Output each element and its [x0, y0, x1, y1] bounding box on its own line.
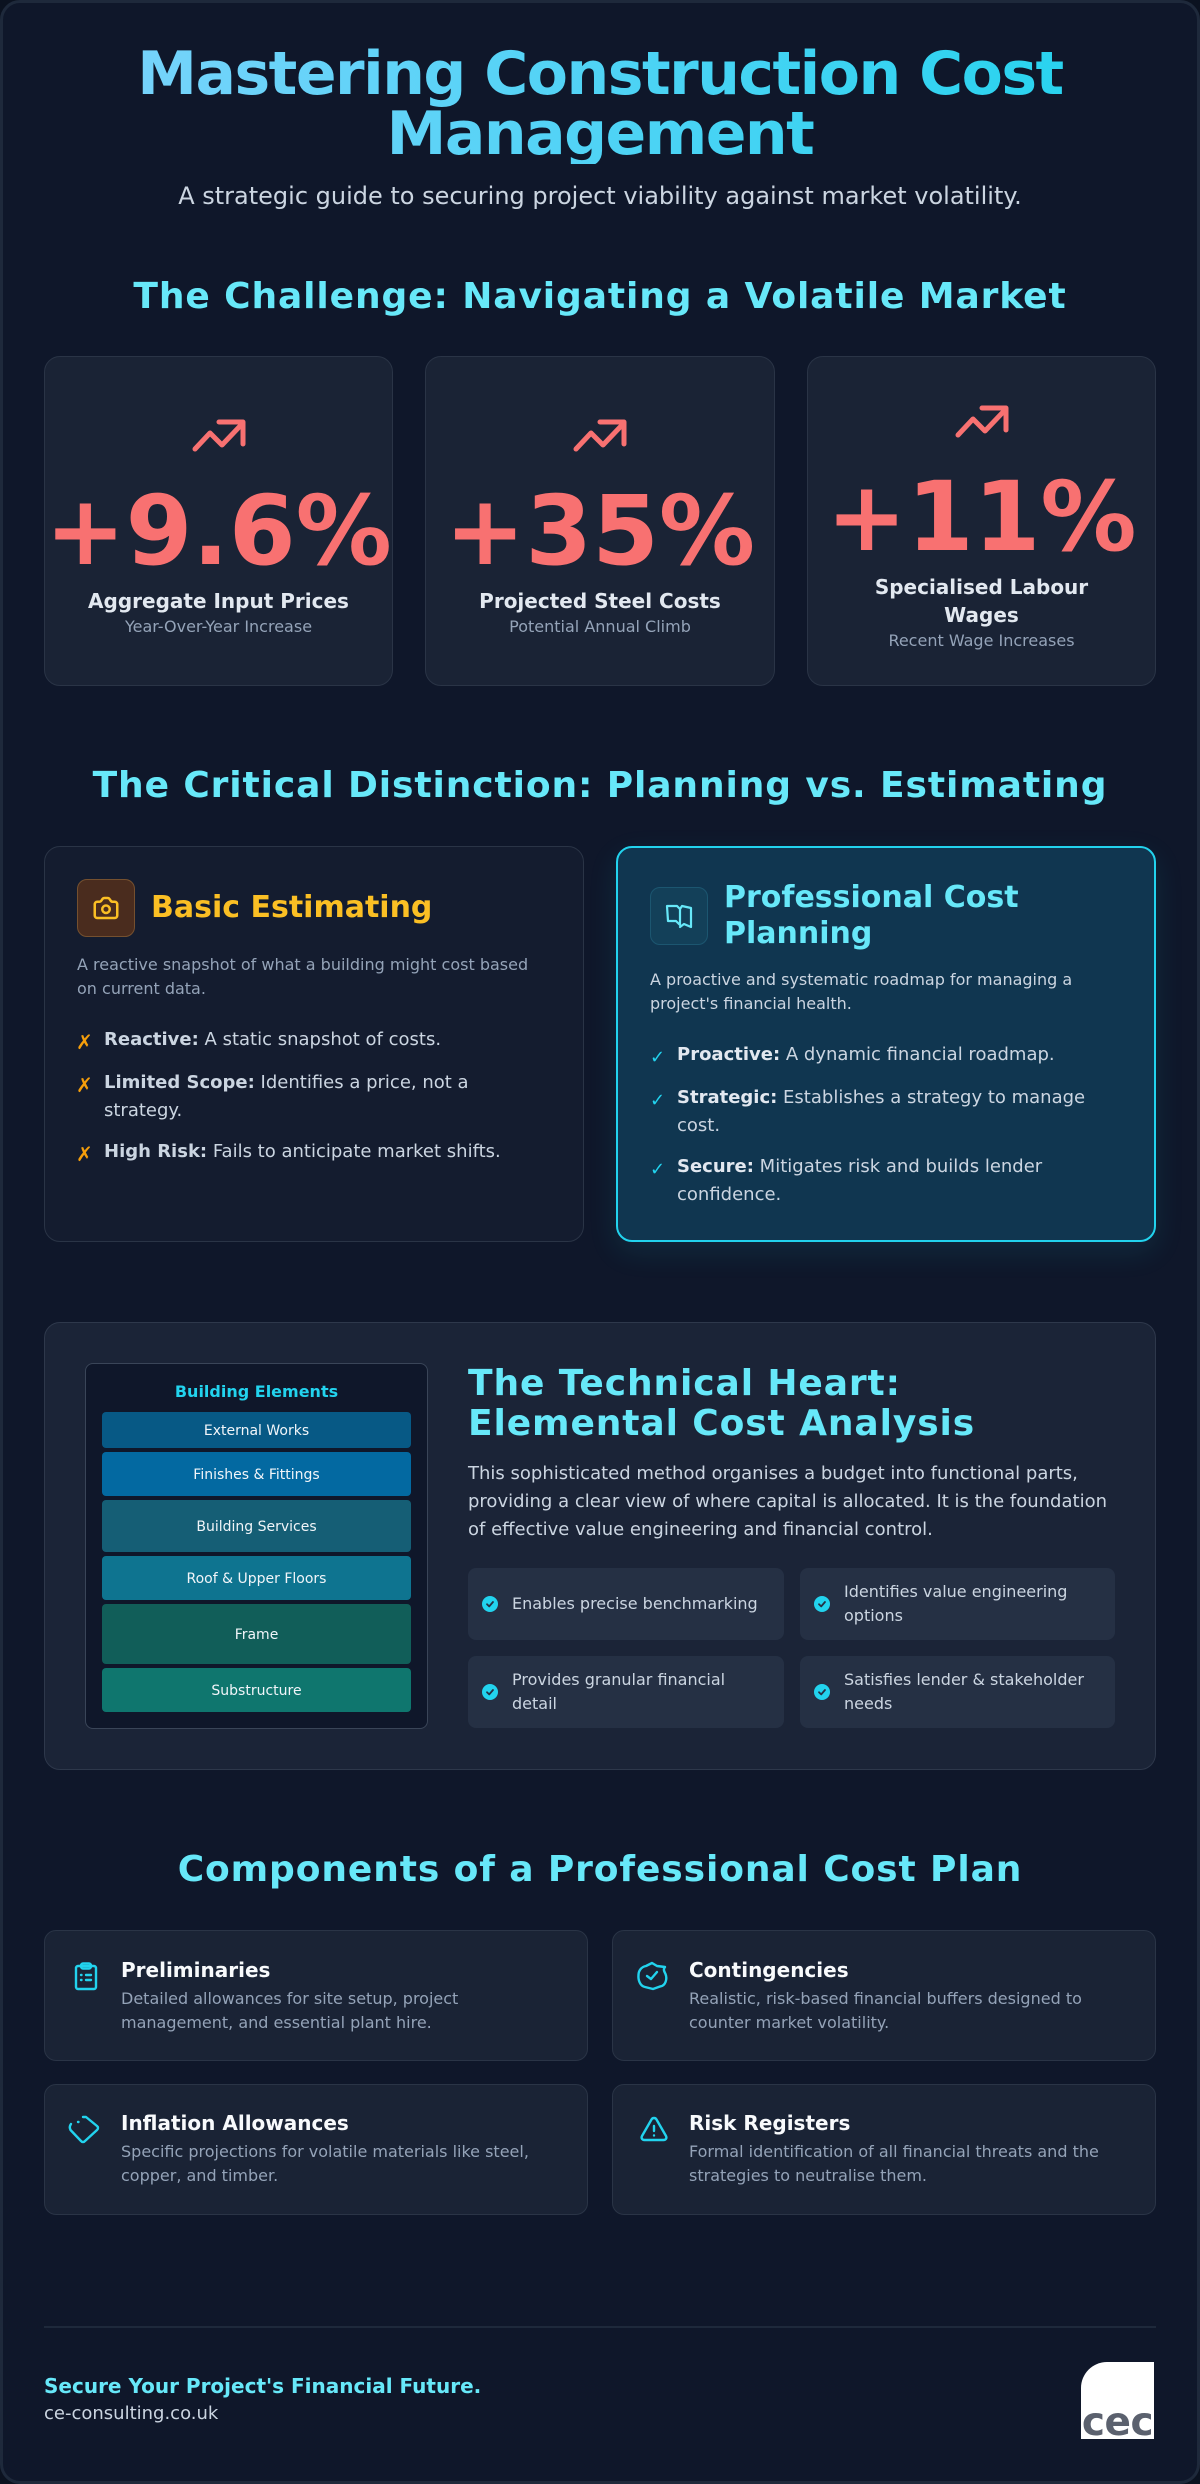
icon: shield check: [637, 1962, 668, 1990]
point: high risk: High Risk: Fails to anticipate market shifts.: [104, 1141, 501, 1162]
chip text: Satisfies lender & stakeholder: [844, 1670, 1084, 1689]
logo: cec: [1081, 2362, 1154, 2439]
heading: the challenge: The Challenge: Navigating a Volatile Market: [133, 276, 1067, 317]
footer call to action: Secure Your Project's Financial Future.: [44, 2374, 481, 2398]
point: secure: Secure: Mitigates risk and builds lender: [677, 1156, 1042, 1177]
preliminaries title: Preliminaries: [121, 1958, 270, 1982]
stat caption: Recent Wage Increases: [888, 631, 1075, 650]
icon: check: [814, 1684, 830, 1700]
point: limited scope: ✗: [76, 1073, 93, 1097]
inflation allowances description: [121, 2142, 529, 2185]
icon: camera: [77, 879, 135, 937]
footer website: ce-consulting.co.uk: [44, 2403, 218, 2424]
point: limited scope: Limited Scope: Identifies a price, not a: [104, 1072, 469, 1093]
stat label: [875, 575, 1088, 627]
panel: projected steel costs stat: [425, 356, 775, 686]
chip: benchmarking: [468, 1568, 784, 1640]
bar: roof and upper floors: [102, 1556, 411, 1600]
chip text: detail: [512, 1694, 557, 1713]
stat label: Wages: [944, 603, 1019, 627]
panel: technical heart: [44, 1322, 1156, 1770]
icon: warning triangle: [640, 2116, 668, 2142]
preliminaries description: Detailed allowances for site setup, project: [121, 1989, 458, 2008]
chip text: Enables precise benchmarking: [512, 1594, 758, 1613]
panel: inflation allowances: [44, 2084, 588, 2215]
icon: tag: [68, 2116, 100, 2144]
technical heart description: of effective value engineering and financial control.: [468, 1519, 933, 1540]
subtitle: A strategic guide to securing project viability against market volatility.: [178, 182, 1022, 210]
professional cost planning description: [650, 970, 1072, 1013]
point: strategic: Strategic: Establishes a strategy to manage: [677, 1087, 1085, 1108]
panel: contingencies: [612, 1930, 1156, 2061]
list: professional cost planning points: [650, 1044, 1085, 1205]
technical heart description: providing a clear view of where capital is allocated. It is the foundation: [468, 1491, 1107, 1512]
heading: critical distinction: The Critical Distinction: Planning vs. Estimating: [93, 765, 1107, 806]
contingencies description: counter market volatility.: [689, 2013, 889, 2032]
risk registers title: Risk Registers: [689, 2111, 850, 2135]
chip text: [844, 1670, 1084, 1713]
point: reactive: ✗: [76, 1030, 93, 1054]
stat label: Aggregate Input Prices: [88, 589, 349, 613]
basic estimating description: A reactive snapshot of what a building might cost based: [77, 955, 528, 974]
point: limited scope: strategy.: [104, 1100, 182, 1121]
chip: value engineering: [800, 1568, 1115, 1640]
panel: professional cost planning: [616, 846, 1156, 1242]
panel: basic estimating: [44, 846, 584, 1242]
professional cost planning title: Planning: [724, 916, 872, 951]
chip text: needs: [844, 1694, 892, 1713]
stat caption: Potential Annual Climb: [509, 617, 691, 636]
point: secure: confidence.: [677, 1184, 781, 1205]
icon: open book: [650, 887, 708, 945]
icon: trending up: [956, 406, 1008, 438]
chip text: Provides granular financial: [512, 1670, 725, 1689]
list: basic estimating points: [76, 1029, 501, 1166]
contingencies description: [689, 1989, 1082, 2032]
chip: granular detail: [468, 1656, 784, 1728]
point: reactive: Reactive: A static snapshot of costs.: [104, 1029, 441, 1050]
inflation allowances description: copper, and timber.: [121, 2166, 278, 2185]
chip text: options: [844, 1606, 903, 1625]
point: strategic: ✓: [650, 1090, 665, 1111]
chip text: [844, 1582, 1067, 1625]
risk registers description: Formal identification of all financial threats and the: [689, 2142, 1099, 2161]
professional cost planning description: A proactive and systematic roadmap for managing a: [650, 970, 1072, 989]
professional cost planning description: project's financial health.: [650, 994, 852, 1013]
icon: check: [482, 1596, 498, 1612]
preliminaries description: [121, 1989, 458, 2032]
bar: finishes and fittings: Finishes & Fittings: [193, 1466, 320, 1482]
point: secure: [650, 1156, 1042, 1205]
point: strategic: [650, 1087, 1085, 1136]
point: strategic: cost.: [677, 1115, 720, 1136]
bar: roof and upper floors: Roof & Upper Floors: [187, 1570, 326, 1586]
point: high risk: ✗: [76, 1142, 93, 1166]
basic estimating title: Basic Estimating: [151, 890, 432, 925]
stat label: Specialised Labour: [875, 575, 1088, 599]
panel: aggregate input prices stat: [44, 356, 393, 686]
technical heart title: The Technical Heart:: [468, 1363, 901, 1404]
bar: building services: [102, 1500, 411, 1552]
bar: frame: [102, 1604, 411, 1664]
technical heart description: This sophisticated method organises a budget into functional parts,: [468, 1463, 1078, 1484]
icon: clipboard: [74, 1962, 98, 1990]
title: Mastering Construction Cost: [137, 39, 1063, 109]
panel: risk registers: [612, 2084, 1156, 2215]
building elements diagram: [85, 1363, 428, 1729]
inflation allowances title: Inflation Allowances: [121, 2111, 349, 2135]
title: [44, 44, 1156, 164]
risk registers description: strategies to neutralise them.: [689, 2166, 927, 2185]
bar: substructure: Substructure: [211, 1682, 302, 1698]
bar: external works: [102, 1412, 411, 1448]
panel: preliminaries: [44, 1930, 588, 2061]
technical heart title: Elemental Cost Analysis: [468, 1403, 975, 1444]
point: limited scope: [76, 1072, 469, 1121]
heading: components: Components of a Professional Cost Plan: [178, 1849, 1022, 1890]
icon: trending up: [192, 420, 246, 452]
point: secure: ✓: [650, 1159, 665, 1180]
diagram title: Building Elements: [175, 1382, 338, 1401]
chip text: [512, 1670, 725, 1713]
icon: check: [814, 1596, 830, 1612]
contingencies description: Realistic, risk-based financial buffers designed to: [689, 1989, 1082, 2008]
title: Management: [387, 99, 813, 169]
bar: external works: External Works: [204, 1422, 309, 1438]
bar: substructure: [102, 1668, 411, 1712]
contingencies title: Contingencies: [689, 1958, 849, 1982]
inflation allowances description: Specific projections for volatile materials like steel,: [121, 2142, 529, 2161]
point: proactive: ✓: [650, 1047, 665, 1068]
icon: check: [482, 1684, 498, 1700]
chip text: Identifies value engineering: [844, 1582, 1067, 1601]
bar: frame: Frame: [235, 1626, 278, 1642]
bar: finishes and fittings: [102, 1452, 411, 1496]
stat label: Projected Steel Costs: [479, 589, 721, 613]
risk registers description: [689, 2142, 1099, 2185]
professional cost planning title: Professional Cost: [724, 880, 1019, 915]
stat caption: Year-Over-Year Increase: [125, 617, 312, 636]
chip: stakeholder needs: [800, 1656, 1115, 1728]
icon: trending up: [574, 420, 626, 452]
technical heart title: [468, 1363, 975, 1444]
point: proactive: Proactive: A dynamic financial roadmap.: [677, 1044, 1055, 1065]
stat value: +9.6%: [45, 475, 392, 587]
bar: building services: Building Services: [196, 1518, 317, 1534]
preliminaries description: management, and essential plant hire.: [121, 2013, 432, 2032]
technical heart description: [468, 1463, 1107, 1540]
panel: specialised labour wages stat: [807, 356, 1156, 686]
professional cost planning title: [724, 880, 1019, 951]
stat value: +35%: [445, 475, 755, 587]
basic estimating description: on current data.: [77, 979, 206, 998]
basic estimating description: [77, 955, 528, 998]
stat value: +11%: [826, 461, 1137, 573]
